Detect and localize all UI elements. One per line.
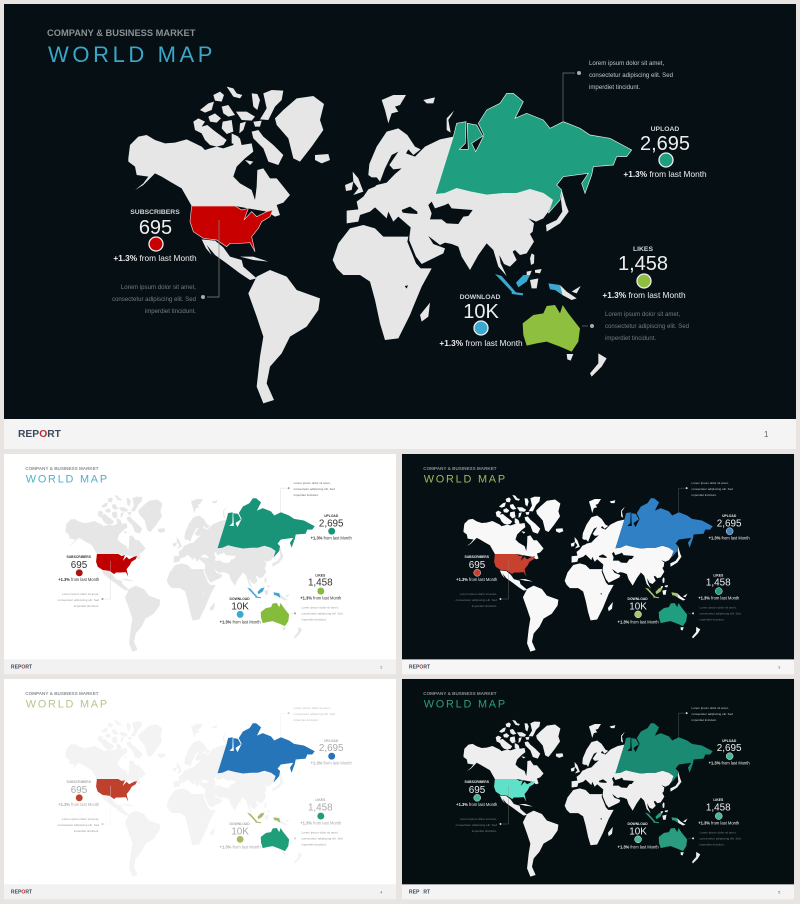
- stat: likes: +1.3% from last Month: [602, 290, 686, 300]
- callout: top note: imperdiet tincidunt.: [692, 493, 717, 497]
- stat: download: 10K: [629, 826, 647, 837]
- callout: left note: [58, 786, 110, 833]
- stat: upload: [709, 514, 750, 541]
- world map: [464, 720, 713, 877]
- callout: top note: consectetur adipiscing elit. Sed: [589, 72, 673, 79]
- callout: top note: consectetur adipiscing elit. Sed: [692, 487, 733, 491]
- USA highlight: [96, 554, 137, 577]
- callout: right note: [582, 311, 689, 342]
- footer bar: REPORT: [11, 889, 33, 895]
- callout: left note: consectetur adipiscing elit. Sed: [456, 823, 497, 827]
- callout: right note: [290, 605, 343, 621]
- slide 5: dark world map, teal variant: [402, 679, 794, 899]
- stat: likes: 1,458: [618, 253, 668, 275]
- callout: left note: imperdiet tincidunt.: [74, 604, 99, 608]
- stat: subscribers: [58, 780, 100, 807]
- stat: subscribers: 695: [139, 217, 172, 239]
- stat: download: [220, 822, 261, 849]
- stat: download: DOWNLOAD: [628, 597, 648, 601]
- callout: top note: [679, 481, 733, 512]
- callout: top note: Lorem ipsum dolor sit amet,: [294, 706, 331, 710]
- USA highlight: [96, 779, 137, 802]
- stat: download: [618, 822, 659, 849]
- stat: subscribers: [113, 209, 197, 263]
- callout: left note: Lorem ipsum dolor sit amet,: [460, 592, 497, 596]
- stat: likes: [300, 798, 342, 826]
- callout: left note: imperdiet tincidunt.: [74, 829, 99, 833]
- stat: upload: [623, 126, 707, 179]
- callout: left note: consectetur adipiscing elit. Sed: [58, 823, 99, 827]
- callout: right note: consectetur adipiscing elit. Sed: [699, 836, 741, 840]
- stat: upload: UPLOAD: [722, 514, 737, 518]
- stat: download: [618, 597, 659, 624]
- footer bar: [4, 884, 396, 899]
- subtitle: COMPANY & BUSINESS MARKET: [47, 28, 196, 38]
- callout: right note: imperdiet tincidunt.: [699, 842, 725, 846]
- callout: right note: consectetur adipiscing elit. Sed: [699, 611, 741, 615]
- callout: right note: Lorem ipsum dolor sit amet,: [699, 605, 737, 609]
- stat: likes: [698, 573, 740, 601]
- Russia highlight: [435, 93, 632, 213]
- stat: subscribers: [456, 780, 498, 807]
- footer bar: 3: [778, 664, 781, 669]
- stat: upload: 2,695: [319, 743, 344, 754]
- stat: subscribers: +1.3% from last Month: [456, 802, 498, 807]
- Australia highlight: [659, 828, 687, 851]
- callout: top note: [281, 481, 335, 512]
- callout: left note: consectetur adipiscing elit. Sed: [456, 598, 497, 602]
- footer bar: 4: [380, 889, 383, 894]
- slide background: [402, 679, 794, 884]
- USA highlight: [190, 206, 273, 252]
- title: WORLD MAP: [48, 42, 216, 67]
- stat: likes: 1,458: [308, 803, 333, 814]
- callout: left note: Lorem ipsum dolor sit amet,: [121, 284, 196, 291]
- callout: left note: [456, 561, 508, 608]
- Australia highlight: [261, 603, 289, 626]
- slide 1: dark world map: [4, 4, 796, 449]
- stat: upload: [311, 514, 352, 541]
- world map: [464, 495, 713, 652]
- slide background: [4, 679, 396, 884]
- slide background: [4, 4, 796, 419]
- Russia highlight: [615, 723, 713, 783]
- stat: likes: [602, 246, 686, 300]
- callout: left note: [58, 561, 110, 608]
- world map: [128, 87, 632, 403]
- stat: subscribers: 695: [71, 785, 88, 796]
- callout: right note: imperdiet tincidunt.: [699, 617, 725, 621]
- subtitle: COMPANY & BUSINESS MARKET: [25, 691, 99, 696]
- footer bar: REPORT: [11, 664, 33, 670]
- callout: top note: consectetur adipiscing elit. Sed: [294, 487, 335, 491]
- stat: upload: +1.3% from last Month: [709, 536, 750, 541]
- footer bar: [402, 659, 794, 674]
- Australia highlight: [659, 603, 687, 626]
- callout: left note: imperdiet tincidunt.: [472, 604, 497, 608]
- stat: subscribers: +1.3% from last Month: [113, 253, 197, 263]
- stat: upload: 2,695: [640, 133, 690, 155]
- stat: subscribers: 695: [71, 560, 88, 571]
- callout: left note: Lorem ipsum dolor sit amet,: [62, 817, 99, 821]
- Indonesia highlight: [645, 813, 678, 823]
- footer bar: REPORT: [18, 429, 62, 440]
- stat: likes: +1.3% from last Month: [300, 596, 342, 601]
- stat: upload: 2,695: [319, 518, 344, 529]
- USA highlight: [494, 554, 535, 577]
- callout: top note: consectetur adipiscing elit. Sed: [294, 712, 335, 716]
- stat: upload: [709, 739, 750, 766]
- callout: top note: consectetur adipiscing elit. Sed: [692, 712, 733, 716]
- stat: likes: 1,458: [706, 578, 731, 589]
- stat: likes: LIKES: [315, 573, 326, 577]
- slide 4: light world map, blue variant: [4, 679, 396, 899]
- footer bar: 5: [778, 889, 781, 894]
- callout: top note: [679, 706, 733, 737]
- callout: right note: consectetur adipiscing elit. Sed: [605, 323, 689, 330]
- callout: right note: Lorem ipsum dolor sit amet,: [301, 605, 339, 609]
- stat: likes: +1.3% from last Month: [698, 596, 740, 601]
- footer bar: [4, 419, 796, 449]
- stat: upload: +1.3% from last Month: [709, 761, 750, 766]
- footer bar: [4, 659, 396, 674]
- callout: top note: imperdiet tincidunt.: [294, 718, 319, 722]
- callout: top note: [281, 706, 335, 737]
- slide background: [402, 454, 794, 659]
- title: WORLD MAP: [26, 699, 109, 711]
- callout: right note: [688, 830, 741, 846]
- stat: likes: 1,458: [706, 803, 731, 814]
- callout: left note: [112, 220, 219, 315]
- callout: top note: Lorem ipsum dolor sit amet,: [294, 481, 331, 485]
- stat: subscribers: SUBSCRIBERS: [67, 780, 92, 784]
- stat: download: +1.3% from last Month: [220, 844, 261, 849]
- Indonesia highlight: [645, 588, 678, 598]
- callout: right note: [688, 605, 741, 621]
- callout: right note: consectetur adipiscing elit. Sed: [301, 611, 343, 615]
- callout: left note: consectetur adipiscing elit. Sed: [112, 296, 196, 303]
- stat: upload: UPLOAD: [324, 514, 339, 518]
- callout: right note: Lorem ipsum dolor sit amet,: [605, 311, 680, 318]
- stat: subscribers: SUBSCRIBERS: [67, 555, 92, 559]
- stat: subscribers: SUBSCRIBERS: [464, 555, 490, 559]
- callout: top note: imperdiet tincidunt.: [294, 493, 319, 497]
- subtitle: COMPANY & BUSINESS MARKET: [423, 691, 497, 696]
- stat: download: +1.3% from last Month: [618, 619, 659, 624]
- stat: subscribers: [456, 555, 498, 582]
- callout: top note: Lorem ipsum dolor sit amet,: [589, 60, 664, 67]
- callout: right note: imperdiet tincidunt.: [605, 335, 656, 342]
- stat: upload: [311, 739, 352, 766]
- stat: upload: +1.3% from last Month: [311, 536, 352, 541]
- stat: download: DOWNLOAD: [460, 294, 500, 301]
- stat: likes: +1.3% from last Month: [698, 821, 740, 826]
- Russia highlight: [615, 498, 713, 558]
- stat: download: 10K: [231, 826, 249, 837]
- Russia highlight: [218, 723, 315, 783]
- stat: likes: [300, 573, 342, 601]
- stat: likes: LIKES: [315, 798, 326, 802]
- stat: download: 10K: [231, 601, 249, 612]
- stat: upload: +1.3% from last Month: [623, 169, 707, 179]
- callout: left note: imperdiet tincidunt.: [472, 829, 497, 833]
- callout: left note: Lorem ipsum dolor sit amet,: [460, 817, 497, 821]
- stat: upload: UPLOAD: [651, 126, 679, 133]
- stat: upload: 2,695: [717, 743, 742, 754]
- callout: top note: imperdiet tincidunt.: [589, 84, 640, 91]
- callout: right note: imperdiet tincidunt.: [301, 842, 327, 846]
- stat: likes: LIKES: [713, 573, 724, 577]
- stat: subscribers: +1.3% from last Month: [456, 577, 498, 582]
- stat: upload: +1.3% from last Month: [311, 761, 352, 766]
- stat: upload: 2,695: [717, 518, 742, 529]
- stat: download: +1.3% from last Month: [220, 619, 261, 624]
- Indonesia highlight: [247, 813, 280, 823]
- stat: likes: LIKES: [633, 246, 653, 253]
- Indonesia highlight: [247, 588, 280, 598]
- stat: download: [439, 294, 523, 348]
- stat: subscribers: +1.3% from last Month: [58, 577, 100, 582]
- footer bar: 2: [380, 664, 382, 669]
- callout: right note: consectetur adipiscing elit. Sed: [301, 836, 343, 840]
- slide 3: dark world map, blue variant: [402, 454, 794, 674]
- stat: download: DOWNLOAD: [230, 822, 250, 826]
- callout: left note: consectetur adipiscing elit. Sed: [58, 598, 99, 602]
- stat: subscribers: SUBSCRIBERS: [130, 209, 180, 216]
- stat: download: DOWNLOAD: [628, 822, 648, 826]
- Australia highlight: [523, 305, 580, 352]
- stat: download: 10K: [463, 301, 499, 323]
- callout: top note: Lorem ipsum dolor sit amet,: [692, 706, 729, 710]
- stat: download: DOWNLOAD: [230, 597, 250, 601]
- stat: download: [220, 597, 261, 624]
- callout: right note: [290, 830, 343, 846]
- stat: likes: 1,458: [308, 578, 333, 589]
- stat: upload: UPLOAD: [324, 739, 339, 743]
- Russia highlight: [218, 498, 315, 558]
- stat: likes: LIKES: [713, 798, 724, 802]
- stat: download: +1.3% from last Month: [618, 844, 659, 849]
- footer bar: 1: [764, 430, 769, 439]
- callout: right note: imperdiet tincidunt.: [301, 617, 327, 621]
- world map: [66, 495, 315, 652]
- callout: left note: Lorem ipsum dolor sit amet,: [62, 592, 99, 596]
- subtitle: COMPANY & BUSINESS MARKET: [25, 466, 99, 471]
- callout: top note: [563, 60, 673, 122]
- Australia highlight: [261, 828, 289, 851]
- stat: download: +1.3% from last Month: [439, 338, 523, 348]
- stat: likes: +1.3% from last Month: [300, 821, 342, 826]
- USA highlight: [494, 779, 535, 802]
- stat: subscribers: 695: [469, 785, 486, 796]
- callout: right note: Lorem ipsum dolor sit amet,: [301, 830, 339, 834]
- callout: top note: Lorem ipsum dolor sit amet,: [692, 481, 729, 485]
- stat: likes: [698, 798, 740, 826]
- footer bar: REPORT: [409, 889, 431, 895]
- Indonesia highlight: [495, 274, 562, 295]
- slide 2: light world map: [4, 454, 396, 674]
- stat: download: 10K: [629, 601, 647, 612]
- title: WORLD MAP: [424, 474, 507, 486]
- stat: upload: UPLOAD: [722, 739, 737, 743]
- stat: subscribers: [58, 555, 100, 582]
- callout: left note: [456, 786, 508, 833]
- slide background: [4, 454, 396, 659]
- footer bar: [402, 884, 794, 899]
- stat: subscribers: +1.3% from last Month: [58, 802, 100, 807]
- world map: [66, 720, 315, 877]
- title: WORLD MAP: [424, 699, 507, 711]
- subtitle: COMPANY & BUSINESS MARKET: [423, 466, 497, 471]
- stat: subscribers: 695: [469, 560, 486, 571]
- callout: left note: imperdiet tincidunt.: [145, 308, 196, 315]
- footer bar: REPORT: [409, 664, 431, 670]
- stat: subscribers: SUBSCRIBERS: [464, 780, 490, 784]
- title: WORLD MAP: [26, 474, 109, 486]
- callout: right note: Lorem ipsum dolor sit amet,: [699, 830, 737, 834]
- callout: top note: imperdiet tincidunt.: [692, 718, 717, 722]
